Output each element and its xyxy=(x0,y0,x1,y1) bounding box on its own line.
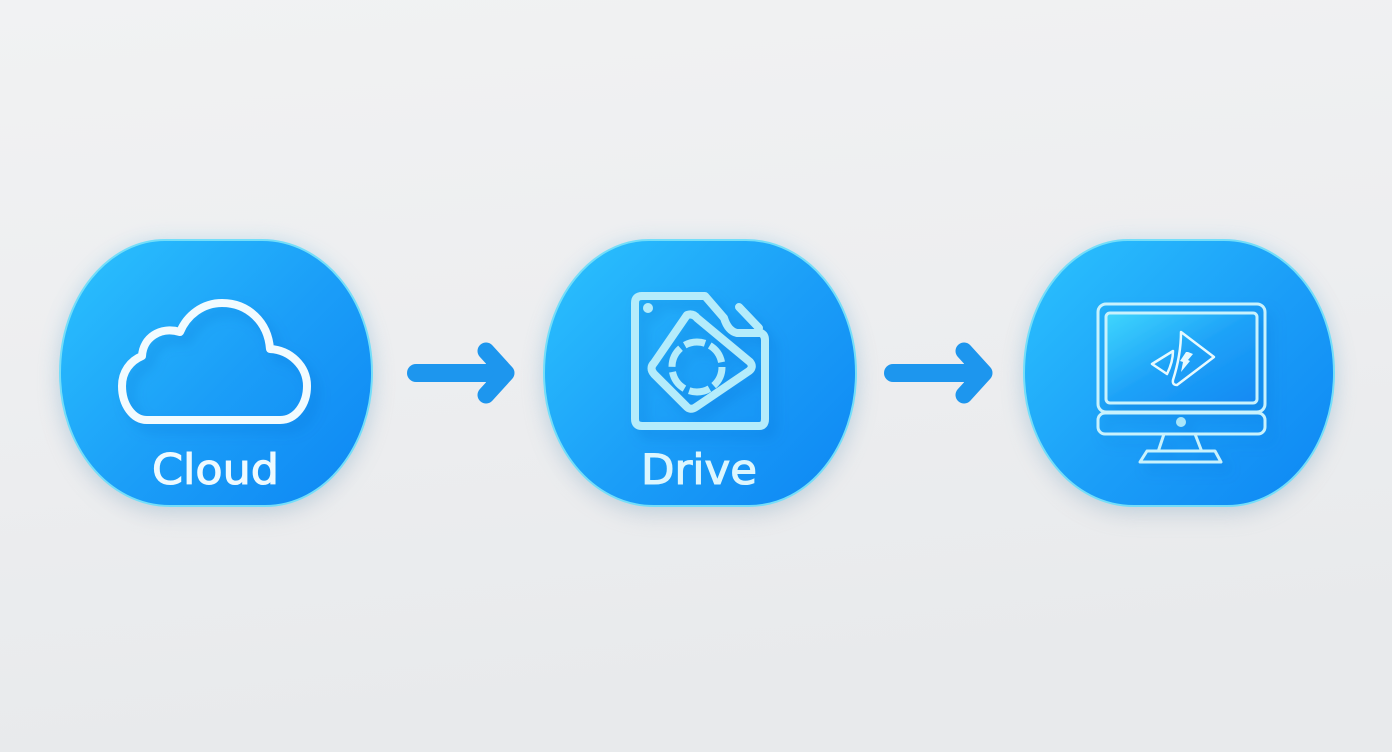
label: Cloud: Cloud xyxy=(152,445,279,494)
panel: cloud xyxy=(60,240,372,514)
label: Drive: Drive xyxy=(641,445,757,494)
arrow: drive to computer xyxy=(893,351,984,395)
panel: computer xyxy=(1024,240,1334,514)
icon: cloud xyxy=(122,303,307,420)
arrow: cloud to drive xyxy=(416,351,506,395)
panel: drive xyxy=(544,240,856,514)
icon: screen glyph xyxy=(1152,332,1214,385)
icon: drive document xyxy=(635,296,765,426)
icon: monitor xyxy=(1098,304,1265,462)
